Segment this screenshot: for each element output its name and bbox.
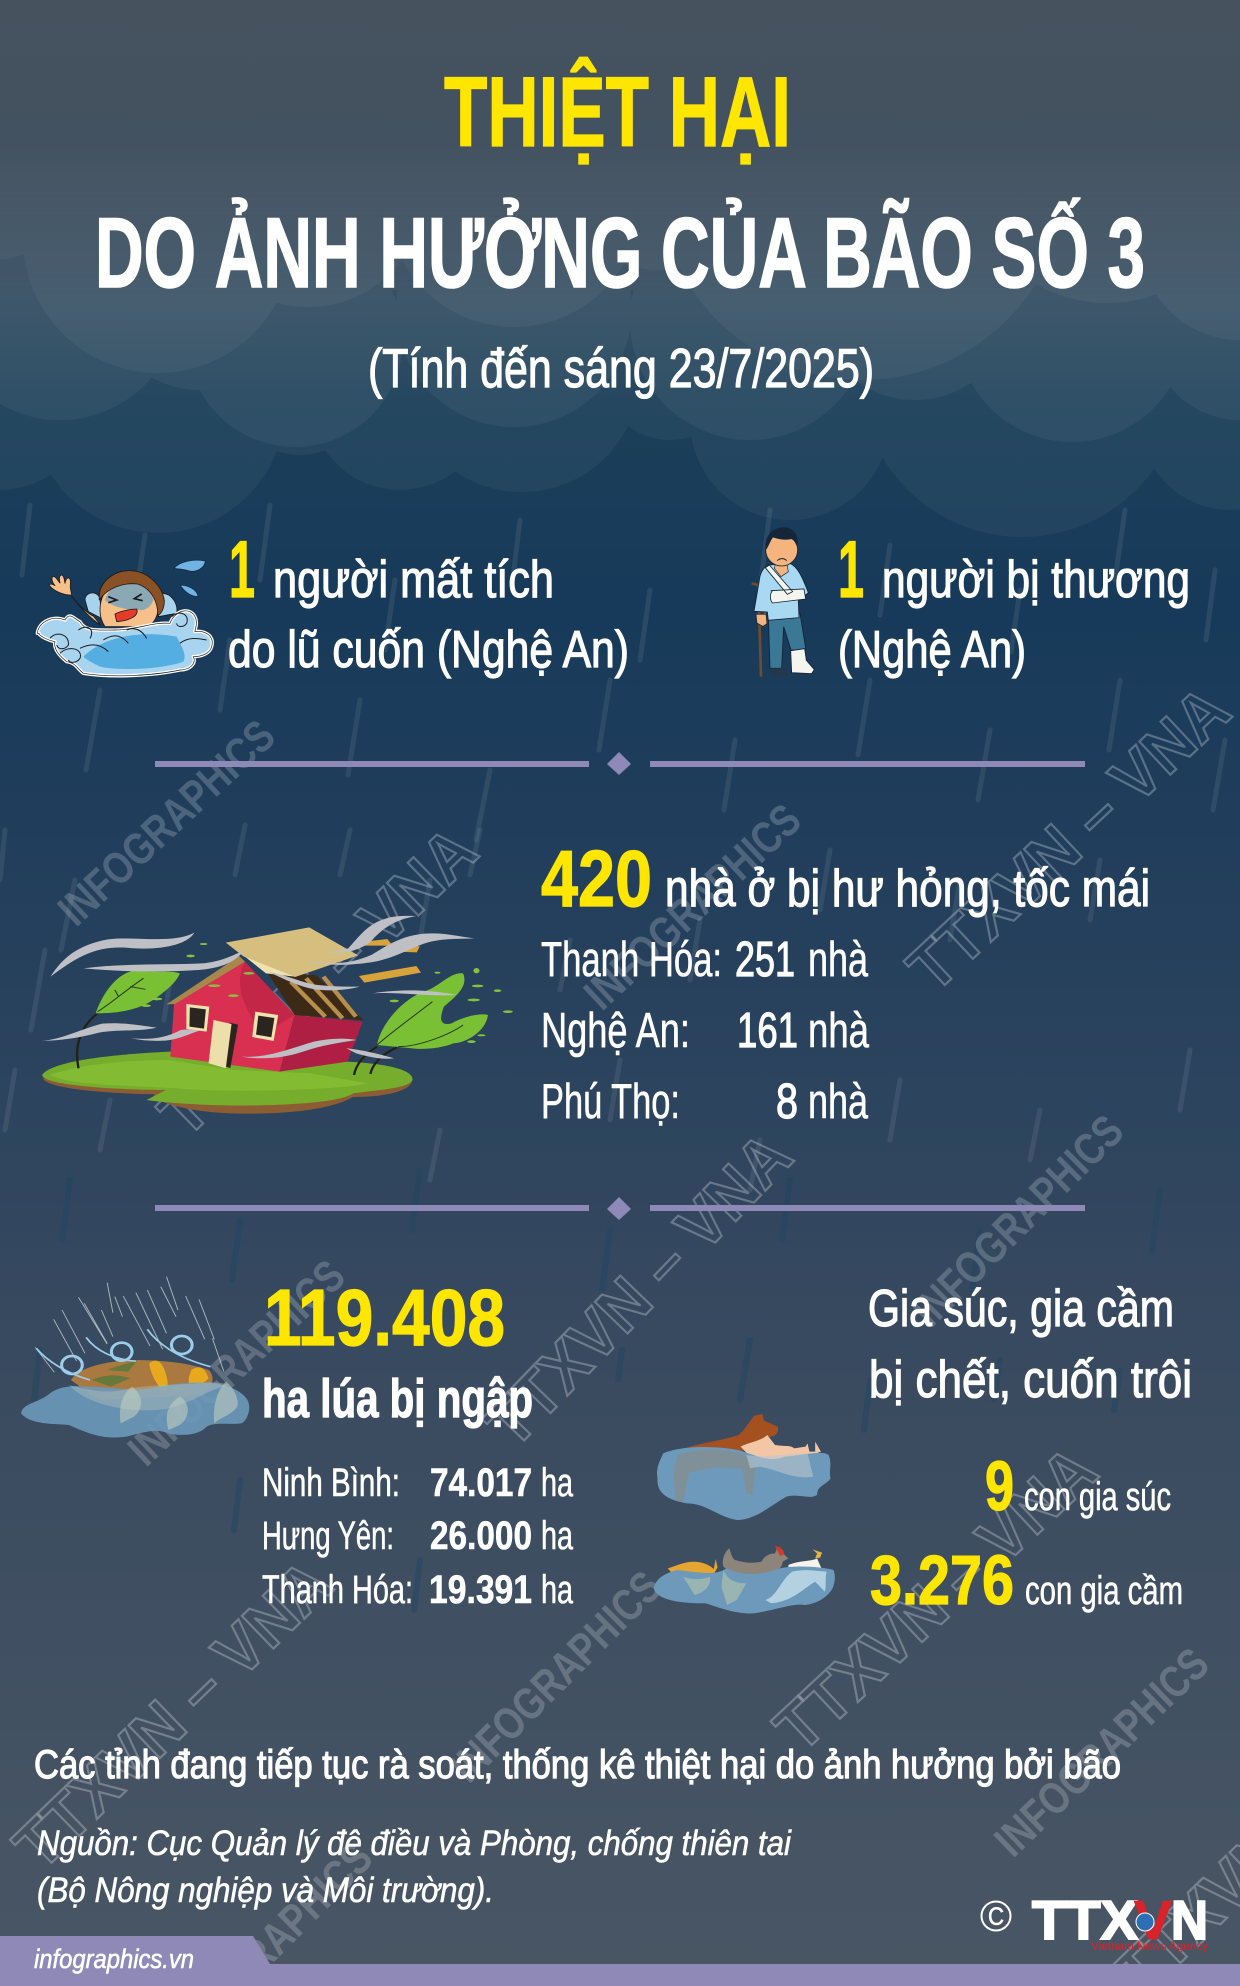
text: injured person: (Nghệ An) bbox=[838, 621, 1026, 679]
head bbox=[766, 534, 798, 566]
mouth bbox=[777, 559, 787, 561]
row: Thanh Hoa: Thanh Hóa: bbox=[262, 1568, 413, 1612]
text: TTXVN – VNA bbox=[144, 812, 491, 1150]
text: missing person: người mất tích bbox=[273, 551, 554, 609]
blue swirls bbox=[36, 1329, 210, 1380]
watermarks: INFOGRAPHICS bbox=[902, 1105, 1133, 1336]
text: poultry count bbox=[870, 1541, 1183, 1619]
icon: drowned cattle bbox=[657, 1414, 830, 1520]
text: injured person bbox=[838, 525, 1190, 679]
divider 1 bbox=[155, 752, 1085, 775]
row: Hung Yen bbox=[262, 1514, 574, 1558]
icon: house in the storm bbox=[37, 916, 513, 1114]
roof bbox=[268, 973, 364, 1020]
icon: injured man with crutch bbox=[752, 527, 814, 677]
row: Ninh Binh: 74.017 bbox=[430, 1461, 532, 1505]
rain lines bbox=[35, 1277, 224, 1372]
text: flooded rice: 119.408 bbox=[264, 1273, 505, 1362]
trees bbox=[77, 1013, 98, 1068]
text: missing person: do lũ cuốn (Nghệ An) bbox=[228, 621, 629, 679]
row: Thanh Hoa: 19.391 bbox=[429, 1568, 532, 1612]
eyes and mouth bbox=[108, 594, 143, 603]
text: damaged houses: 420 bbox=[541, 834, 652, 923]
text: damaged houses bbox=[541, 834, 1150, 1129]
copyright symbol: C bbox=[988, 1903, 1004, 1931]
title bbox=[95, 56, 1145, 399]
flying planks bbox=[364, 939, 420, 952]
row: Phu Tho: Phú Thọ: bbox=[541, 1075, 680, 1129]
logo: TTXVN: Vietnam News Agency bbox=[1091, 1939, 1208, 1953]
hand bbox=[756, 614, 767, 626]
water drops bbox=[174, 560, 206, 597]
text: TTXVN – VNA bbox=[0, 1545, 346, 1883]
row: Thanh Hoa bbox=[262, 1568, 574, 1612]
text: missing person bbox=[228, 525, 629, 679]
row: Nghe An: Nghệ An: bbox=[541, 1004, 690, 1058]
arm bbox=[49, 575, 101, 625]
icon: flooded rice field bbox=[21, 1277, 249, 1438]
text: TTXVN – VNA bbox=[760, 1431, 1110, 1765]
water bbox=[37, 611, 212, 676]
text: cattle count: con gia súc bbox=[1024, 1475, 1171, 1519]
windows and door bbox=[186, 1004, 209, 1032]
wind streaks bbox=[37, 916, 475, 1059]
storm clouds bbox=[0, 197, 1240, 537]
shirt bbox=[754, 563, 808, 620]
row: Hung Yen: 26.000 bbox=[430, 1514, 532, 1558]
source: (Bộ Nông nghiệp và Môi trường). bbox=[37, 1871, 494, 1910]
icon: person swept by flood bbox=[37, 560, 212, 676]
row: Hung Yen: ha bbox=[541, 1514, 574, 1558]
sling bbox=[765, 565, 806, 603]
footer band bbox=[0, 1936, 1240, 1986]
text: missing person: 1 bbox=[229, 525, 255, 615]
text: cattle count bbox=[985, 1447, 1171, 1525]
row: Ninh Binh bbox=[262, 1461, 574, 1505]
rain streaks bbox=[0, 505, 1225, 1190]
text: injured person: 1 bbox=[838, 525, 864, 615]
row: Nghe An: 161 bbox=[737, 1004, 798, 1058]
copyright symbol bbox=[982, 1902, 1010, 1931]
icon: drowned poultry bbox=[654, 1546, 835, 1614]
row: Phu Tho bbox=[541, 1075, 869, 1129]
inner water bbox=[83, 634, 185, 669]
watermarks bbox=[48, 710, 1218, 1986]
watermarks: INFOGRAPHICS bbox=[440, 1561, 671, 1792]
row: Hung Yen: Hưng Yên: bbox=[262, 1514, 394, 1558]
row: Nghe An: nhà bbox=[808, 1004, 870, 1058]
row: Thanh Hoa: Thanh Hóa: bbox=[541, 933, 722, 987]
row: Phu Tho: 8 bbox=[776, 1075, 798, 1129]
crutch bbox=[752, 582, 767, 677]
website label: infographics.vn bbox=[34, 1944, 194, 1974]
row: Ninh Binh: ha bbox=[541, 1461, 574, 1505]
hair bbox=[99, 571, 164, 616]
shoe bbox=[771, 668, 788, 677]
golden rice bbox=[149, 1361, 168, 1393]
row: Ninh Binh: Ninh Bình: bbox=[262, 1461, 400, 1505]
swirl lines bbox=[50, 613, 207, 662]
watermarks: INFOGRAPHICS bbox=[48, 710, 285, 935]
island bbox=[43, 1078, 412, 1114]
watermarks: INFOGRAPHICS bbox=[574, 794, 811, 1019]
logo: TTXVN: TTX bbox=[1032, 1889, 1138, 1951]
cast on leg bbox=[791, 649, 814, 674]
row: Thanh Hoa: nhà bbox=[808, 933, 869, 987]
neck bbox=[774, 562, 788, 577]
house walls bbox=[170, 962, 295, 1072]
text: flooded rice: ha lúa bị ngập bbox=[262, 1369, 533, 1429]
heading: livestock: bị chết, cuốn trôi bbox=[869, 1351, 1192, 1409]
title line 1: THIỆT HẠI bbox=[444, 56, 791, 167]
text: flooded rice bbox=[262, 1273, 574, 1612]
text: TTXVN – VNA bbox=[471, 1118, 805, 1461]
row: Nghe An bbox=[541, 1004, 870, 1058]
row: Thanh Hoa: ha bbox=[541, 1568, 574, 1612]
source: Nguồn: Cục Quản lý đê điều và Phòng, chống thiên tai bbox=[37, 1824, 792, 1863]
leaves bbox=[142, 943, 513, 1043]
row: Thanh Hoa: 251 bbox=[735, 933, 795, 987]
small waves behind bbox=[85, 593, 177, 618]
text: cattle count: 9 bbox=[985, 1447, 1014, 1525]
pants bbox=[768, 613, 806, 668]
text: poultry count: con gia cầm bbox=[1025, 1569, 1183, 1613]
water bbox=[21, 1383, 249, 1438]
logo: TTXVN: N bbox=[1171, 1889, 1208, 1951]
source bbox=[37, 1824, 792, 1910]
logo: TTXVN bbox=[1032, 1889, 1208, 1953]
mound bbox=[71, 1360, 213, 1400]
drooping rice bbox=[120, 1382, 238, 1430]
heading: livestock bbox=[868, 1280, 1192, 1409]
watermarks: INFOGRAPHICS bbox=[118, 1250, 355, 1475]
logo: TTXVN: V bbox=[1134, 1889, 1172, 1951]
divider 2 bbox=[155, 1197, 1085, 1220]
row: Phu Tho: nhà bbox=[808, 1075, 869, 1129]
subtitle: (Tính đến sáng 23/7/2025) bbox=[368, 337, 874, 399]
text: poultry count: 3.276 bbox=[870, 1541, 1014, 1619]
hair bbox=[766, 527, 798, 550]
head bbox=[100, 578, 158, 627]
